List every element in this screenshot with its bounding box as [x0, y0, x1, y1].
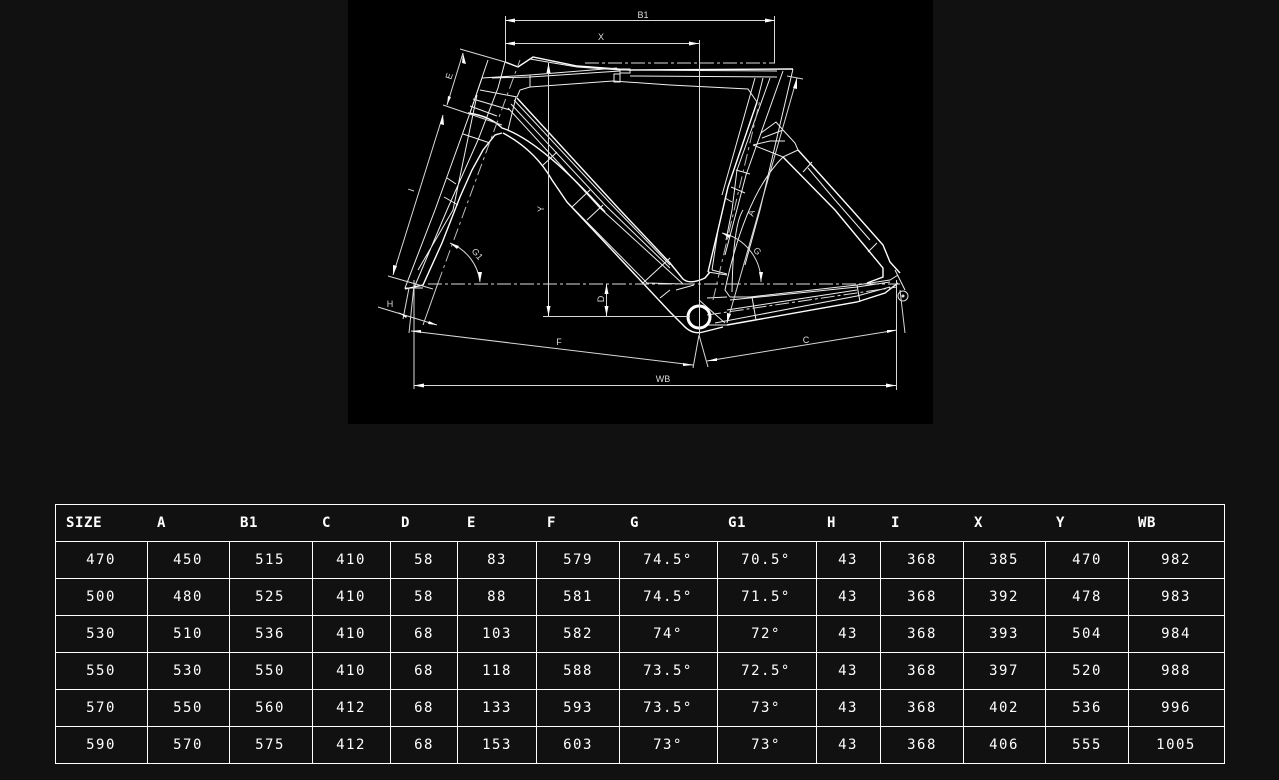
dimension labels: X: [598, 32, 604, 42]
table row: 570: 536: [1072, 700, 1102, 716]
table row: 570: [86, 700, 1191, 716]
table row: 590: [86, 737, 1196, 753]
table header row: I: [891, 515, 900, 531]
table row: 470: [86, 552, 1191, 568]
table row: 550: 68: [414, 663, 434, 679]
table header row: G1: [728, 515, 746, 531]
dimension labels: I: [406, 187, 416, 193]
table row: 530: 536: [255, 626, 285, 642]
table row: 500: 410: [336, 589, 366, 605]
table row: 590: 1005: [1156, 737, 1196, 753]
table row: 550: 520: [1072, 663, 1102, 679]
table row: 570: 570: [86, 700, 116, 716]
table header row: [66, 515, 1156, 531]
icon: bottom bracket: [688, 306, 710, 328]
table row: 500: 500: [86, 589, 116, 605]
table row: 550: 410: [336, 663, 366, 679]
table header row: SIZE: [66, 515, 102, 531]
dimension labels: C: [803, 335, 810, 345]
table row: 550: 988: [1161, 663, 1191, 679]
table row: 470: 58: [414, 552, 434, 568]
table row: 470: 368: [907, 552, 937, 568]
table header row: G: [630, 515, 639, 531]
dimension labels: G: [751, 245, 763, 257]
table row: 590: 68: [414, 737, 434, 753]
table row: 590: 153: [482, 737, 512, 753]
table row: 570: 368: [907, 700, 937, 716]
table row: 570: 68: [414, 700, 434, 716]
table row: 550: [86, 663, 1191, 679]
dimension labels: E: [443, 72, 455, 80]
table row: 550: 588: [563, 663, 593, 679]
table row: 570: 593: [563, 700, 593, 716]
table header row: C: [322, 515, 331, 531]
table row: 590: 368: [907, 737, 937, 753]
table row: 500: 88: [487, 589, 507, 605]
dimension labels: B1: [637, 10, 649, 20]
table row: 570: 73.5°: [643, 700, 693, 716]
table row: 570: 996: [1161, 700, 1191, 716]
table row: 530: 510: [173, 626, 203, 642]
table row: 590: 412: [336, 737, 366, 753]
table row: 470: 385: [989, 552, 1019, 568]
table row: 550: 550: [255, 663, 285, 679]
table row: 500: 480: [173, 589, 203, 605]
table row: 550: 397: [989, 663, 1019, 679]
icon: bike frame outline: [405, 57, 908, 333]
table header row: H: [827, 515, 836, 531]
table row: 500: 392: [989, 589, 1019, 605]
table row: 470: 70.5°: [741, 552, 791, 568]
table row: 470: 43: [838, 552, 858, 568]
table row: 570: 43: [838, 700, 858, 716]
table row: 590: 555: [1072, 737, 1102, 753]
table row: 570: 402: [989, 700, 1019, 716]
dimension labels: D: [596, 295, 606, 302]
table header row: F: [547, 515, 556, 531]
table row: 550: 550: [86, 663, 116, 679]
table row: 590: 43: [838, 737, 858, 753]
dimension labels: F: [556, 337, 562, 347]
table row: 530: 410: [336, 626, 366, 642]
table row: 570: 412: [336, 700, 366, 716]
table row: 590: 603: [563, 737, 593, 753]
table row: 530: 103: [482, 626, 512, 642]
table row: 500: 983: [1161, 589, 1191, 605]
table row: 470: 515: [255, 552, 285, 568]
dimension lines: [378, 16, 905, 390]
table row: 590: 406: [989, 737, 1019, 753]
table row: 530: 582: [563, 626, 593, 642]
table row: 530: 504: [1072, 626, 1102, 642]
table row: 500: 525: [255, 589, 285, 605]
table row: 550: 118: [482, 663, 512, 679]
table row: 470: 579: [563, 552, 593, 568]
table row: 570: 560: [255, 700, 285, 716]
table header row: A: [157, 515, 166, 531]
table row: 570: 133: [482, 700, 512, 716]
table row: 500: 368: [907, 589, 937, 605]
table row: 470: 450: [173, 552, 203, 568]
table: frame geometry by size: [55, 504, 1225, 764]
table header row: WB: [1138, 515, 1156, 531]
table row: 550: 368: [907, 663, 937, 679]
table row: 530: 72°: [751, 626, 781, 642]
table header row: B1: [240, 515, 258, 531]
table row: 500: 478: [1072, 589, 1102, 605]
table row: 550: 72.5°: [741, 663, 791, 679]
dimension labels: G1: [470, 246, 485, 262]
table row: 550: 43: [838, 663, 858, 679]
table header row: D: [401, 515, 410, 531]
table header row: Y: [1056, 515, 1065, 531]
table row: 590: 73°: [653, 737, 683, 753]
dimension labels: H: [387, 299, 393, 309]
table row: 530: 393: [989, 626, 1019, 642]
table row: 530: 530: [86, 626, 116, 642]
table row: 500: 71.5°: [741, 589, 791, 605]
table row: 590: 570: [173, 737, 203, 753]
panel: frame geometry drawing: [348, 0, 933, 424]
table row: 470: 982: [1161, 552, 1191, 568]
table row: 550: 73.5°: [643, 663, 693, 679]
table row: 530: [86, 626, 1191, 642]
table row: 500: 74.5°: [643, 589, 693, 605]
table row: 470: 470: [86, 552, 116, 568]
table row: 590: 73°: [751, 737, 781, 753]
table row: 470: 74.5°: [643, 552, 693, 568]
table row: 550: 530: [173, 663, 203, 679]
table row: 530: 43: [838, 626, 858, 642]
dimension labels: WB: [656, 374, 670, 384]
table row: 570: 73°: [751, 700, 781, 716]
table row: 530: 368: [907, 626, 937, 642]
dimension labels: [387, 10, 810, 384]
table header row: X: [974, 515, 983, 531]
table grid: [55, 504, 1225, 764]
table row: 470: 470: [1072, 552, 1102, 568]
table row: 470: 410: [336, 552, 366, 568]
table row: 470: 83: [487, 552, 507, 568]
table header row: E: [467, 515, 476, 531]
table row: 530: 68: [414, 626, 434, 642]
table row: 500: 43: [838, 589, 858, 605]
icon: rear axle: [898, 291, 908, 301]
table row: 530: 74°: [653, 626, 683, 642]
table row: 570: 550: [173, 700, 203, 716]
table row: 590: 575: [255, 737, 285, 753]
table row: 500: [86, 589, 1191, 605]
table row: 500: 581: [563, 589, 593, 605]
table row: 530: 984: [1161, 626, 1191, 642]
dimension labels: A: [745, 209, 757, 217]
table row: 590: 590: [86, 737, 116, 753]
dimension labels: Y: [536, 206, 546, 212]
table row: 500: 58: [414, 589, 434, 605]
